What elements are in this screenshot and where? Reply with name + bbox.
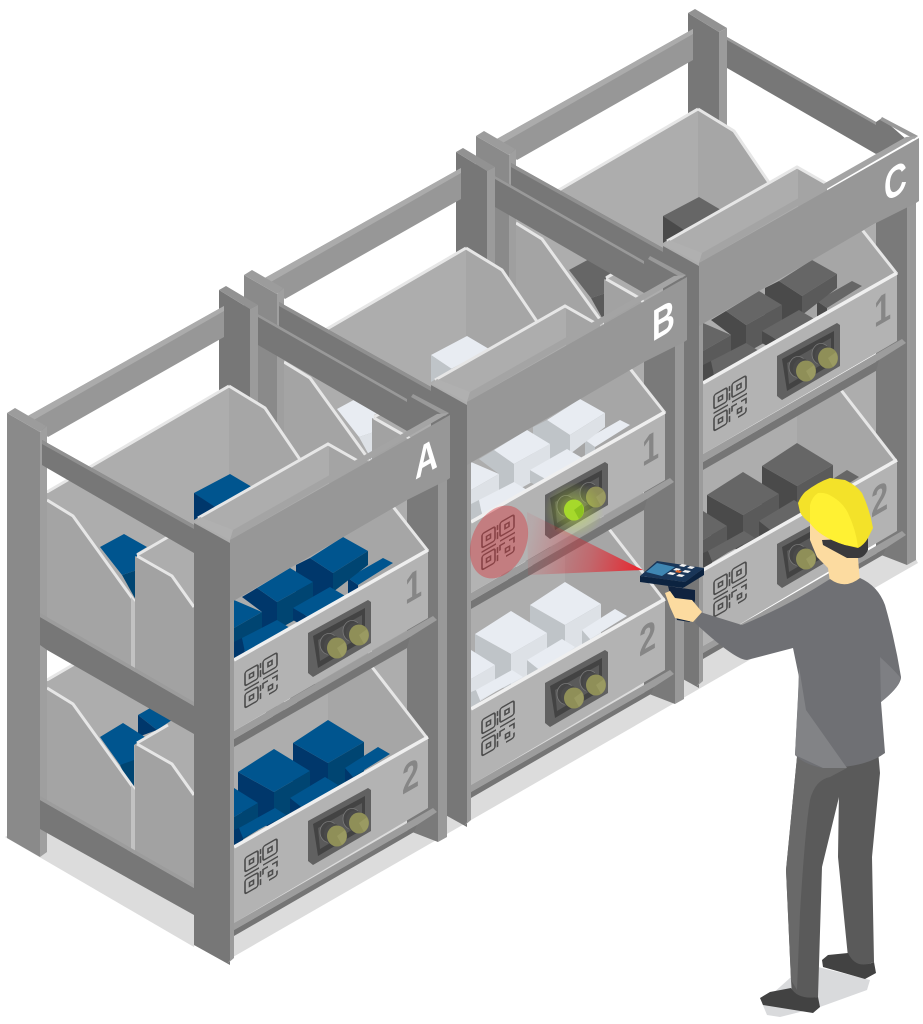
rack B shelf number 2: 2 xyxy=(639,611,656,667)
rack B shelf 1 with white boxes xyxy=(471,342,674,609)
sleeve highlight xyxy=(880,657,900,702)
hair xyxy=(822,538,868,558)
rack B shelf 2 light module xyxy=(545,650,608,727)
rack B shelf 2 with white boxes xyxy=(471,510,674,798)
rack A shelf 2 QR code xyxy=(244,838,278,894)
hand xyxy=(665,591,702,622)
rack C rear frame and centre bin xyxy=(495,9,876,373)
rack A shelf 2 light module xyxy=(308,788,371,865)
rack A xyxy=(7,286,450,965)
rack B left side bins xyxy=(284,362,466,770)
icon: lit green button xyxy=(544,482,604,538)
left leg xyxy=(786,757,847,1000)
rack A front frame xyxy=(7,394,450,965)
scanner handle xyxy=(668,586,695,622)
rack B right post xyxy=(644,332,684,704)
rack A shelf 1 with blue boxes xyxy=(234,480,437,747)
scanner screen xyxy=(646,563,675,576)
rack C left side bins xyxy=(516,223,698,631)
worker foot shadow xyxy=(762,967,870,1017)
rack C letter: C xyxy=(884,149,907,213)
rack C shelf 1 QR code xyxy=(714,375,747,431)
worker xyxy=(640,478,901,1017)
rack A left side bins xyxy=(47,500,229,908)
handheld scanner xyxy=(640,561,704,588)
rack A shelf number 2: 2 xyxy=(402,749,419,805)
right shoe xyxy=(822,953,876,979)
rack C shelf 2 light module xyxy=(777,511,840,588)
rack B shelf 1 light module xyxy=(545,462,608,539)
scanner body top xyxy=(640,561,704,582)
left leg highlight xyxy=(786,757,847,990)
scanner keypad xyxy=(667,564,695,577)
rack A shelf 2 with blue boxes xyxy=(234,648,437,936)
rack A shelf 1 light module xyxy=(308,600,371,677)
hard hat highlight xyxy=(810,493,858,547)
rack C shelf number 1: 1 xyxy=(874,282,891,338)
rack C shelf 1 light module xyxy=(777,323,840,400)
shirt lower highlight xyxy=(795,667,847,768)
rack A letter: A xyxy=(415,426,438,490)
rack B xyxy=(244,148,687,827)
rack B rear frame and centre bin xyxy=(263,148,644,512)
red laser beam xyxy=(527,512,643,575)
rack A rear frame and centre bin xyxy=(26,286,407,650)
rack B shelf number 1: 1 xyxy=(642,421,659,477)
rack A right post xyxy=(407,470,447,842)
rack C right post xyxy=(876,193,916,565)
rack C shelf 1 with dark boxes xyxy=(703,203,906,470)
rack B shelf 1 QR code xyxy=(482,514,515,570)
rack B letter: B xyxy=(652,288,675,352)
rack B front frame xyxy=(244,256,687,827)
rack C xyxy=(476,9,919,688)
rack C shelf number 2: 2 xyxy=(871,472,888,528)
scan spot on QR code xyxy=(459,496,539,588)
rack C shelf 2 with dark boxes xyxy=(703,371,906,659)
rack A shelf number 1: 1 xyxy=(405,559,422,615)
rack B shelf 2 QR code xyxy=(482,700,515,756)
left shoe xyxy=(760,988,820,1013)
right leg xyxy=(830,750,880,967)
rack C front frame xyxy=(476,117,919,688)
torso and arm xyxy=(695,578,901,768)
neck and head xyxy=(810,523,860,587)
floor shadow xyxy=(5,540,918,957)
hard hat xyxy=(798,478,873,548)
rack A shelf 1 QR code xyxy=(244,652,278,708)
scanner body edge xyxy=(640,568,704,588)
rack C shelf 2 QR code xyxy=(714,561,747,617)
